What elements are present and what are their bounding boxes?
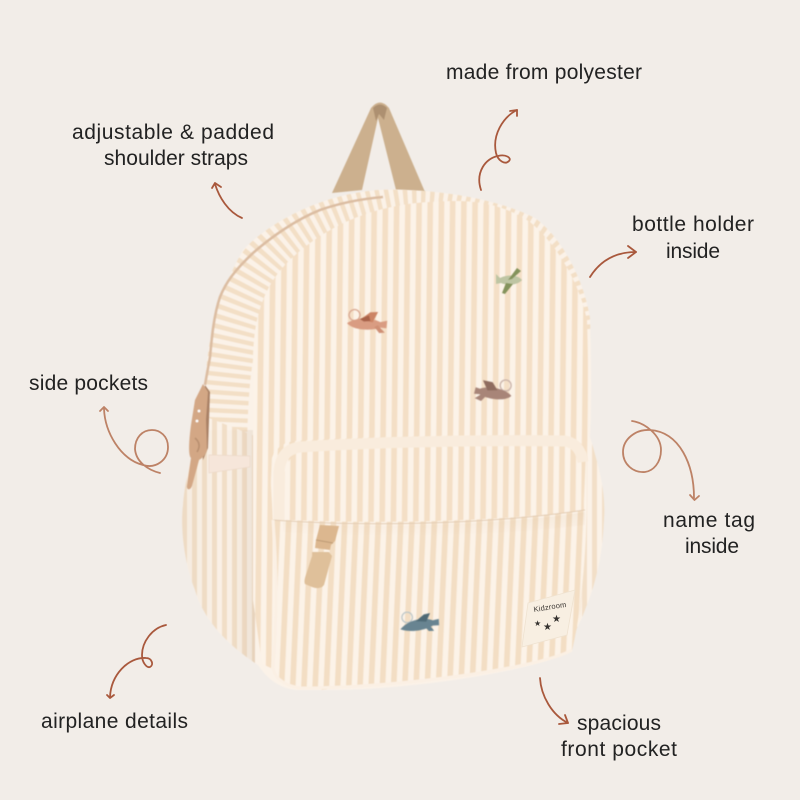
arrow: shoulder straps [212,183,242,218]
label: spacious front pocket: front pocket [561,738,677,761]
brand label [522,590,575,647]
label: name tag inside [663,509,755,558]
side pocket elastic band [209,455,250,473]
label: adjustable and padded shoulder straps [72,121,274,170]
label: name tag inside: inside [685,535,739,558]
backpack illustration [170,102,612,690]
front pocket [270,435,587,688]
label: spacious front pocket [561,712,677,761]
airplane: mauve [473,377,513,404]
label: bottle holder inside: bottle holder [632,213,754,236]
label star 3: ★ [552,614,561,625]
front pocket zipper pull [304,525,339,588]
label star 1: ★ [534,619,541,628]
arrow: spacious front pocket [540,678,568,724]
label: spacious front pocket: spacious [577,712,661,735]
label: bottle holder inside [632,213,754,263]
arrow: name tag [623,421,699,500]
backpack body [170,190,612,690]
airplane: green [496,268,522,294]
label star 2: ★ [543,622,552,633]
label: airplane details: airplane details [41,710,188,733]
label: adjustable and padded shoulder straps: shoulder straps [104,147,248,170]
arrow: airplane details [107,625,166,698]
arrow: made from polyester [479,110,517,190]
backpack handle [332,102,425,193]
label: adjustable and padded shoulder straps: adjustable & padded [72,121,274,144]
side zipper pull [187,384,210,489]
airplane: blue [400,611,439,632]
arrow: bottle holder [590,246,636,277]
airplane: terracotta [346,309,388,334]
brand label: Kidzroom [533,600,567,614]
label: made from polyester: made from polyester [446,61,642,84]
label: side pockets: side pockets [29,372,148,395]
label: name tag inside: name tag [663,509,755,532]
label: bottle holder inside: inside [666,240,720,263]
arrow: side pockets [100,407,168,473]
